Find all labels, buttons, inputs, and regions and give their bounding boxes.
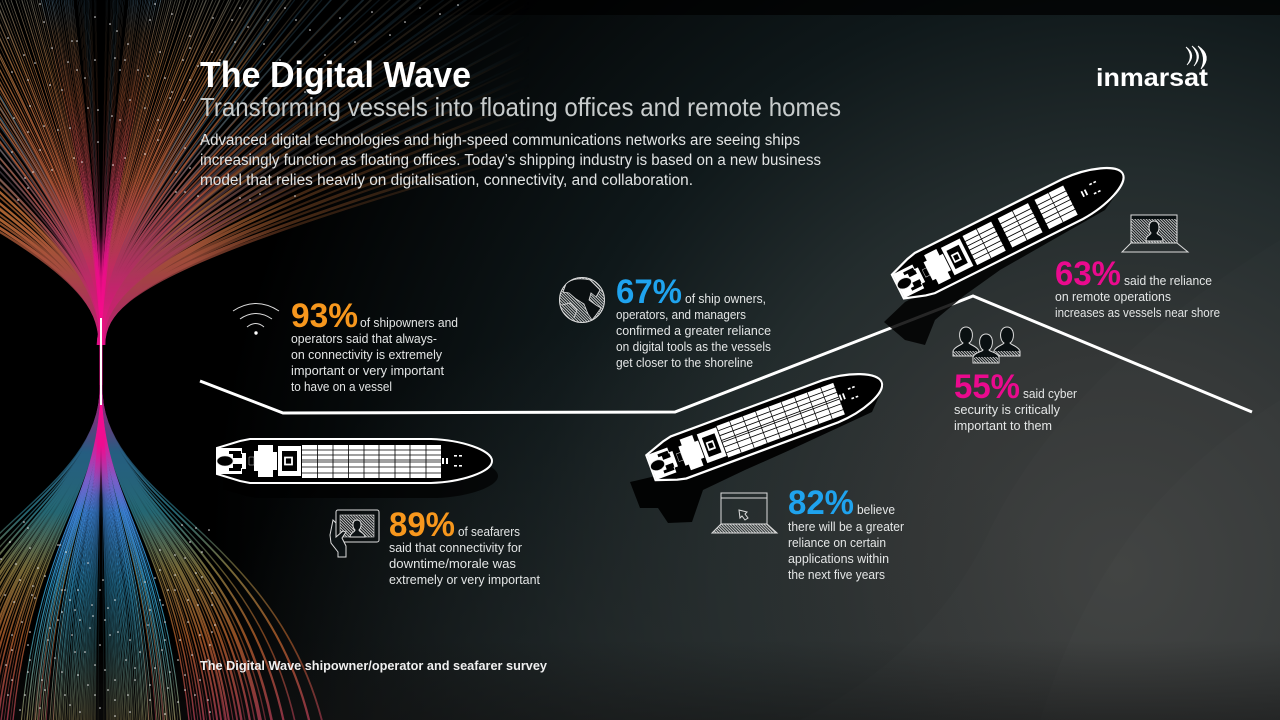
fibre optic wave, upper fan bbox=[0, 0, 504, 345]
introduction paragraph bbox=[200, 132, 821, 189]
stat: 82% applications: 82% bbox=[788, 484, 854, 522]
stat: 93% connectivity: on connectivity is extremely bbox=[291, 348, 443, 362]
stat: 82% applications bbox=[788, 484, 904, 582]
stat: 89% seafarers: of seafarers bbox=[458, 525, 520, 539]
icon: laptop with remote person bbox=[1122, 215, 1188, 252]
introduction paragraph: model that relies heavily on digitalisation, connectivity, and collaboration. bbox=[200, 172, 693, 189]
stat: 63% remote operations: increases as vessels near shore bbox=[1055, 306, 1220, 320]
stat: 55% cyber security bbox=[954, 368, 1077, 433]
stat: 67% digital tools bbox=[616, 273, 771, 370]
footer source note: The Digital Wave shipowner/operator and seafarer survey bbox=[200, 658, 548, 673]
stat: 82% applications: applications within bbox=[788, 552, 889, 566]
stat: 63% remote operations bbox=[1055, 255, 1220, 320]
stat: 63% remote operations: 63% bbox=[1055, 255, 1121, 293]
stat: 93% connectivity bbox=[291, 297, 458, 394]
title: The Digital Wave bbox=[200, 54, 471, 95]
stat: 55% cyber security: important to them bbox=[954, 419, 1052, 433]
route line bbox=[200, 296, 1252, 413]
stat: 67% digital tools: operators, and managers bbox=[616, 308, 746, 322]
stat: 89% seafarers: said that connectivity for bbox=[389, 541, 522, 555]
stat: 89% seafarers bbox=[389, 506, 541, 587]
stat: 67% digital tools: 67% bbox=[616, 273, 682, 311]
stat: 63% remote operations: said the reliance bbox=[1124, 274, 1212, 288]
icon: tablet in hand bbox=[330, 510, 379, 557]
stat: 55% cyber security: 55% bbox=[954, 368, 1020, 406]
stat: 89% seafarers: extremely or very important bbox=[389, 573, 541, 587]
stat: 55% cyber security: said cyber bbox=[1023, 387, 1077, 401]
ship 3 with shadow bbox=[884, 154, 1133, 345]
fibre optic wave, lower fan bbox=[0, 385, 322, 720]
stat: 82% applications: reliance on certain bbox=[788, 536, 886, 550]
stat: 82% applications: believe bbox=[857, 503, 895, 517]
stat: 67% digital tools: of ship owners, bbox=[685, 292, 766, 306]
logo: inmarsat bbox=[1096, 46, 1209, 92]
data points on the wave bbox=[1, 4, 458, 716]
stat: 82% applications: there will be a greater bbox=[788, 520, 904, 534]
icon: wifi bbox=[233, 304, 279, 335]
subtitle: Transforming vessels into floating offices and remote homes bbox=[200, 92, 841, 122]
stat: 93% connectivity: operators said that always- bbox=[291, 332, 437, 346]
logo: inmarsat: inmarsat bbox=[1096, 64, 1209, 92]
stat: 67% digital tools: get closer to the shoreline bbox=[616, 356, 753, 370]
stat: 63% remote operations: on remote operations bbox=[1055, 290, 1171, 304]
stat: 67% digital tools: confirmed a greater reliance bbox=[616, 324, 771, 338]
stat: 93% connectivity: important or very important bbox=[291, 364, 445, 378]
stat: 89% seafarers: 89% bbox=[389, 506, 455, 544]
stat: 93% connectivity: of shipowners and bbox=[360, 316, 458, 330]
icon: people bbox=[953, 327, 1020, 363]
stat: 82% applications: the next five years bbox=[788, 568, 885, 582]
introduction paragraph: Advanced digital technologies and high-speed communications networks are seeing ships bbox=[200, 132, 800, 149]
introduction paragraph: increasingly function as floating offices. Today’s shipping industry is based on a new business bbox=[200, 152, 821, 169]
glowing centre of the wave bbox=[90, 235, 112, 495]
icon: laptop with cursor bbox=[712, 493, 777, 533]
ship 2 with shadow bbox=[630, 361, 889, 523]
stat: 67% digital tools: on digital tools as the vessels bbox=[616, 340, 771, 354]
stat: 93% connectivity: to have on a vessel bbox=[291, 380, 392, 394]
stat: 55% cyber security: security is critically bbox=[954, 403, 1061, 417]
icon: globe bbox=[560, 278, 604, 322]
stat: 89% seafarers: downtime/morale was bbox=[389, 557, 516, 571]
ship 1 with shadow bbox=[217, 439, 498, 498]
stat: 93% connectivity: 93% bbox=[291, 297, 358, 335]
